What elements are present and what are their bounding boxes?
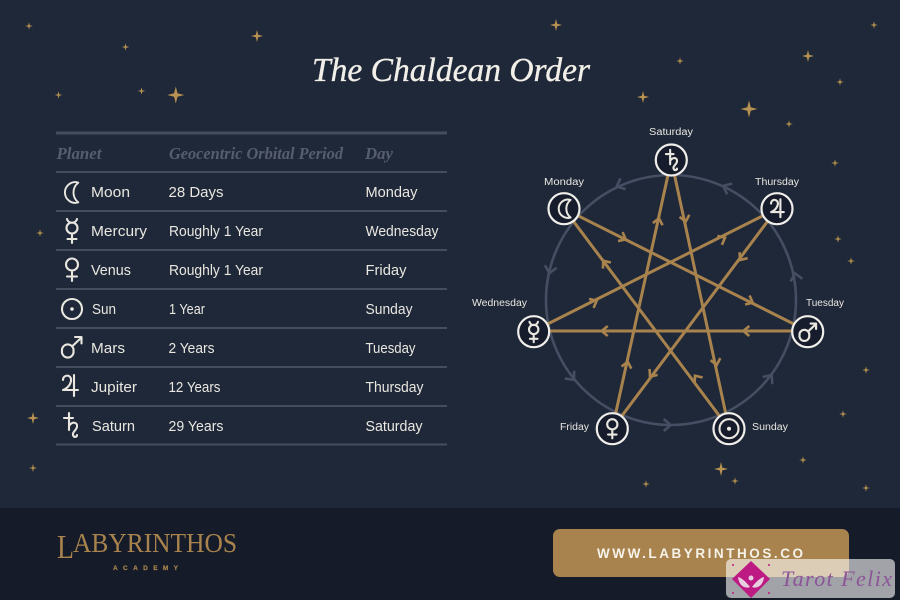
- row: Mars: Tuesday: [366, 341, 416, 357]
- row: Venus: Friday: [366, 263, 407, 279]
- row: Saturn: [64, 413, 423, 437]
- row: Jupiter: Thursday: [366, 380, 424, 396]
- row: Moon: Moon: [91, 185, 130, 201]
- node: Tuesday: [792, 298, 844, 347]
- row: Mercury: Wednesday: [366, 224, 439, 240]
- logo: Labyrinthos Academy: [57, 528, 237, 572]
- button: website link: WWW.LABYRINTHOS.CO: [597, 546, 803, 561]
- row: Mars: [62, 337, 416, 358]
- row: Moon: Monday: [366, 185, 418, 201]
- row: Saturn: Saturn: [92, 419, 135, 435]
- row: Mercury: [66, 219, 439, 243]
- table header: Day: [364, 144, 393, 163]
- row: Jupiter: 12 Years: [168, 380, 220, 396]
- row: Sun: Sun: [92, 302, 116, 318]
- node: Sunday: Sunday: [752, 422, 788, 433]
- node: Monday: Monday: [544, 177, 584, 188]
- node: Friday: [560, 413, 628, 444]
- row: Moon: [65, 182, 418, 203]
- row: Sun: [62, 299, 413, 319]
- row: Mercury: Mercury: [91, 224, 148, 240]
- node: Sunday: [714, 413, 788, 444]
- watermark: Tarot Felix: [726, 559, 895, 598]
- row: Moon: 28 Days: [168, 185, 224, 201]
- row: Jupiter: [63, 375, 424, 396]
- row: Venus: Roughly 1 Year: [169, 263, 263, 279]
- row: Saturn: Saturday: [366, 419, 423, 435]
- logo: Labyrinthos Academy: ABYRINTHOS: [73, 528, 237, 558]
- table header: [56, 144, 393, 163]
- table header: Planet: [56, 144, 103, 163]
- node: Wednesday: Wednesday: [472, 298, 527, 309]
- node: Tuesday: Tuesday: [806, 298, 844, 309]
- button: website link: [553, 529, 849, 577]
- node: Saturday: Saturday: [649, 127, 693, 138]
- logo: Labyrinthos Academy: L: [57, 529, 74, 566]
- row: Venus: [66, 258, 407, 281]
- title: The Chaldean Order: [312, 52, 591, 89]
- star lines with arrows: [534, 160, 808, 429]
- watermark: Tarot Felix: Tarot Felix: [781, 566, 892, 591]
- row: Mars: Mars: [91, 341, 125, 357]
- node: Thursday: Thursday: [755, 177, 799, 188]
- panel: planet table: [56, 132, 447, 444]
- table header: Geocentric Orbital Period: [169, 144, 343, 163]
- row: Venus: Venus: [91, 263, 131, 279]
- footer band: [0, 508, 900, 600]
- row: Jupiter: Jupiter: [91, 380, 137, 396]
- node: Monday: [544, 177, 584, 224]
- row: Saturn: 29 Years: [168, 419, 224, 435]
- node: Wednesday: [472, 298, 549, 347]
- icon: lotus diamond: [732, 561, 770, 598]
- node: Friday: Friday: [560, 422, 589, 433]
- node: Saturday: [649, 127, 693, 176]
- logo: Labyrinthos Academy: ACADEMY: [113, 565, 179, 572]
- chart: heptagram of the Chaldean order: [472, 127, 844, 444]
- row: Sun: Sunday: [366, 302, 413, 318]
- row: Sun: 1 Year: [169, 302, 205, 318]
- row: Mercury: Roughly 1 Year: [169, 224, 263, 240]
- ring with arrows: [543, 175, 802, 431]
- node: Thursday: [755, 177, 799, 224]
- row: Mars: 2 Years: [168, 341, 214, 357]
